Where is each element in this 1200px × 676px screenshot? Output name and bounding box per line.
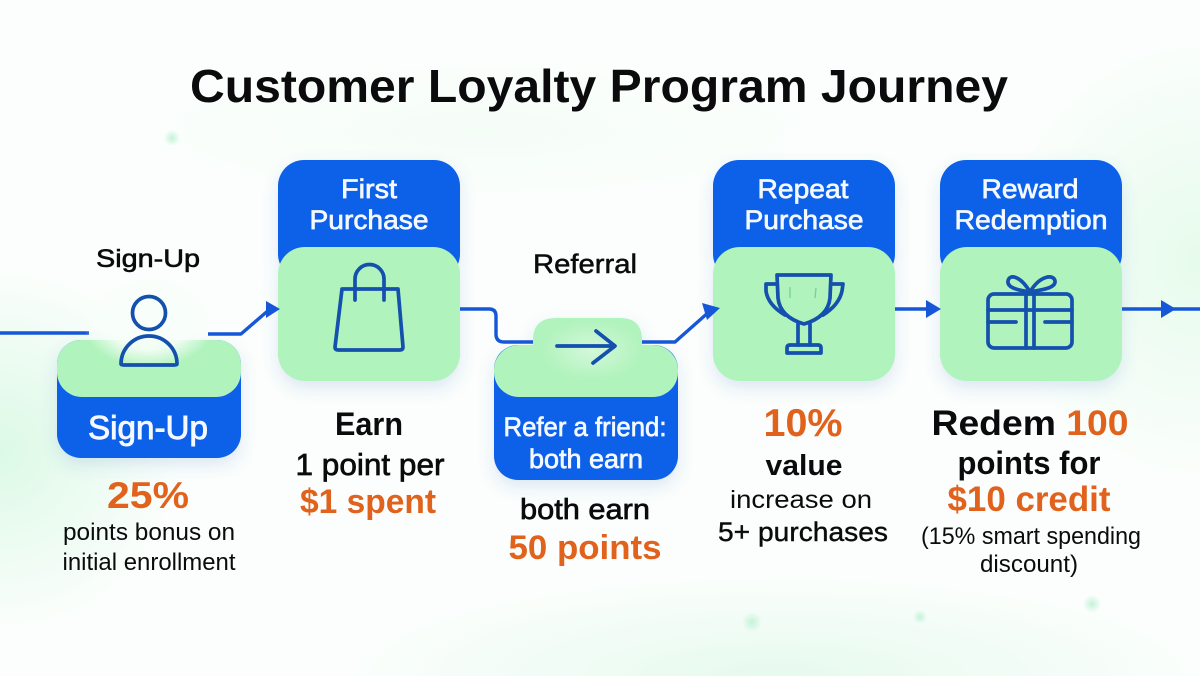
icon: person — [121, 296, 177, 365]
repeat purchase stat: increase on — [730, 486, 872, 514]
referral card label: Refer a friend: — [504, 412, 666, 442]
reward redemption stat: discount) — [980, 551, 1078, 578]
reward redemption card label — [954, 174, 1108, 235]
sign-up card — [57, 340, 241, 458]
sign-up card label: Sign-Up — [88, 409, 208, 446]
referral card — [494, 318, 678, 480]
first purchase stat: $1 spent — [300, 483, 436, 521]
reward redemption stat: (15% smart spending — [921, 523, 1141, 550]
step: referral — [494, 249, 678, 567]
sign-up stat: initial enrollment — [62, 549, 236, 576]
reward redemption card — [940, 160, 1122, 381]
reward redemption card label: Reward — [982, 174, 1078, 204]
sign-up stat — [62, 475, 236, 576]
sign-up stat: points bonus on — [63, 519, 235, 546]
arrow: referral to repeat purchase — [642, 303, 720, 342]
first purchase card label: Purchase — [310, 205, 428, 235]
icon: shopping bag — [335, 265, 403, 350]
referral card label — [504, 412, 666, 474]
arrow: exit from reward redemption — [1122, 300, 1200, 318]
arrow: sign-up to first purchase — [208, 301, 280, 334]
repeat purchase card label — [744, 174, 864, 235]
referral card label: both earn — [529, 444, 643, 474]
referral stat — [508, 494, 662, 567]
reward redemption stat: points for — [958, 445, 1100, 481]
first purchase stat: 1 point per — [296, 447, 444, 482]
icon: arrow — [557, 331, 615, 363]
repeat purchase card — [713, 160, 895, 381]
connector: entry line to sign-up — [0, 331, 89, 335]
reward redemption stat: Redem 100 — [932, 404, 1128, 443]
reward redemption stat — [921, 404, 1141, 578]
first purchase card label: First — [341, 174, 398, 204]
step: repeat purchase — [713, 160, 895, 547]
repeat purchase stat: 5+ purchases — [718, 517, 888, 547]
referral stat: both earn — [520, 494, 650, 526]
first purchase stat — [296, 406, 444, 521]
reward redemption card label: Redemption — [954, 205, 1108, 235]
sign-up icon glow — [83, 276, 215, 368]
step: reward redemption — [921, 160, 1141, 578]
arrow: repeat purchase to reward redemption — [895, 300, 941, 318]
title: Customer Loyalty Program Journey — [190, 60, 1008, 112]
first purchase card — [278, 160, 460, 381]
sign-up heading: Sign-Up — [96, 245, 200, 273]
first purchase card label — [310, 174, 428, 235]
reward redemption stat: $10 credit — [948, 480, 1111, 519]
repeat purchase stat — [718, 402, 888, 547]
referral icon glow — [542, 320, 642, 380]
repeat purchase card label: Purchase — [744, 205, 864, 235]
referral stat: 50 points — [508, 529, 662, 567]
icon: gift box — [988, 277, 1072, 348]
step: sign-up — [57, 245, 241, 576]
repeat purchase card label: Repeat — [758, 174, 849, 204]
referral heading: Referral — [533, 249, 637, 279]
sign-up stat: 25% — [107, 475, 189, 516]
step: first purchase — [278, 160, 460, 521]
icon: trophy — [766, 275, 843, 353]
repeat purchase stat: value — [766, 450, 842, 482]
first purchase stat: Earn — [335, 406, 403, 442]
arrow: first purchase to referral — [460, 309, 533, 342]
repeat purchase stat: 10% — [764, 402, 842, 445]
